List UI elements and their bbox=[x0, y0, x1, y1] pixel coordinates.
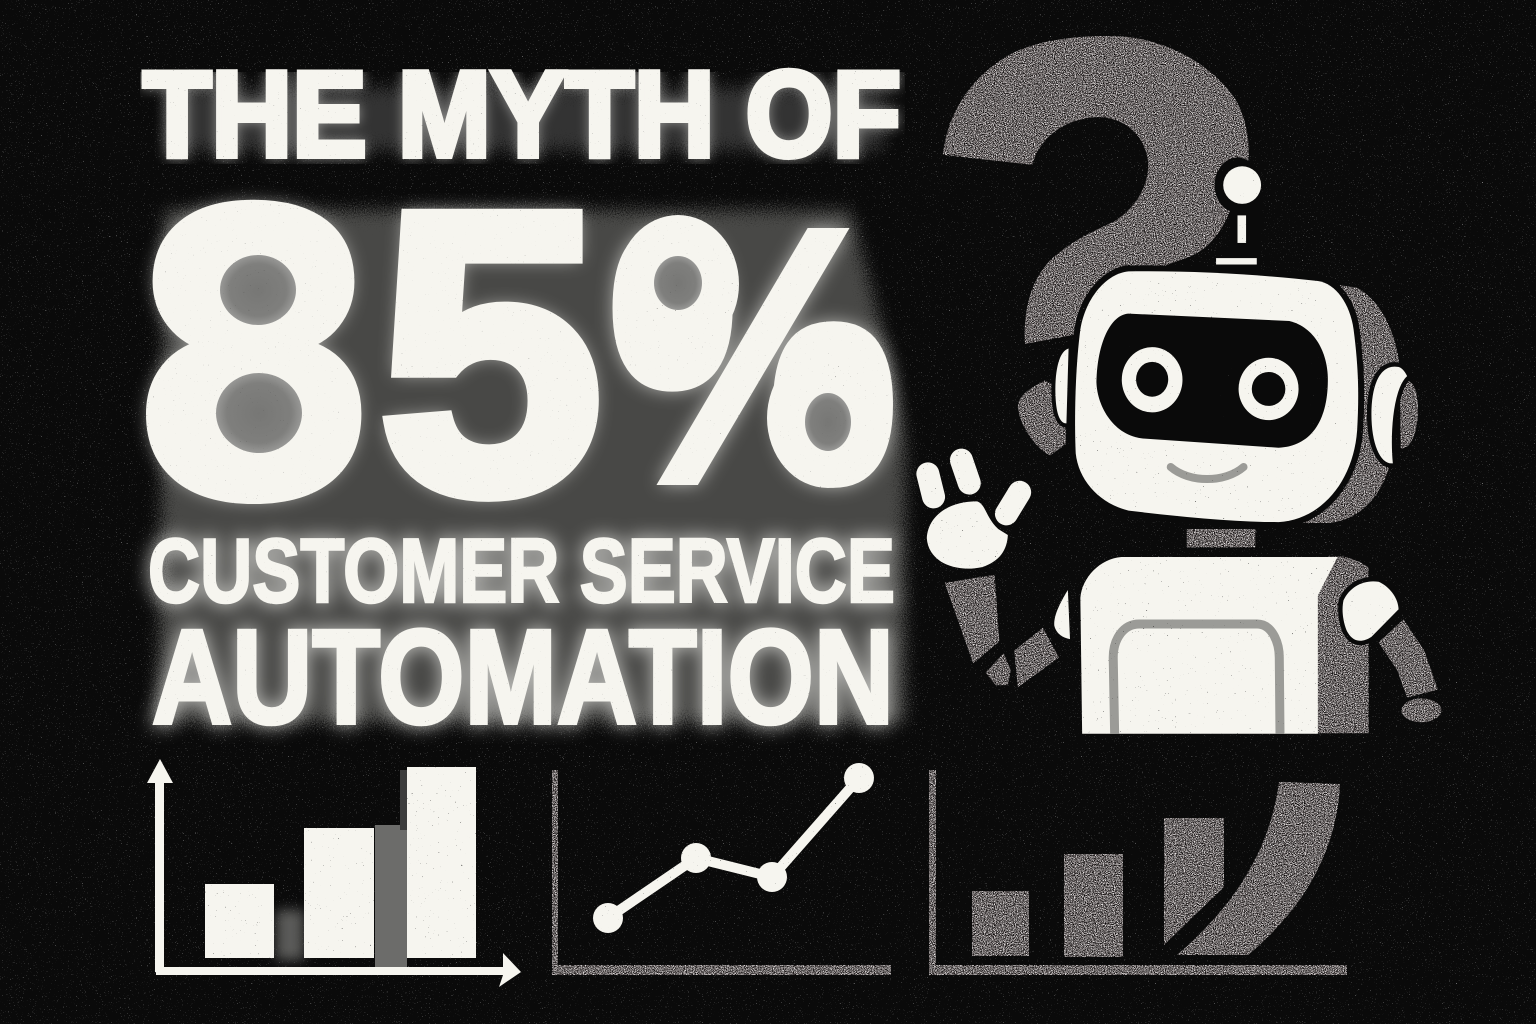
robot grey shadow parts bbox=[945, 283, 1441, 733]
question mark bbox=[943, 36, 1249, 344]
bars bbox=[205, 767, 476, 958]
waving hand bbox=[927, 460, 1020, 569]
chart: line graph bbox=[552, 763, 891, 975]
line chart axes bbox=[552, 770, 891, 975]
title glow bbox=[140, 46, 905, 752]
trend line bbox=[593, 763, 874, 933]
title glow: 8 bbox=[140, 122, 367, 580]
grey bars bbox=[972, 854, 1123, 957]
head bbox=[1075, 271, 1358, 522]
right ear bbox=[1371, 367, 1407, 463]
eyes bbox=[1122, 347, 1299, 420]
cut bar bbox=[1164, 818, 1224, 945]
right hand bbox=[1343, 581, 1399, 641]
left shoulder bbox=[1054, 590, 1070, 639]
visor bbox=[1096, 314, 1328, 448]
title glow: AUTOMATION bbox=[152, 603, 894, 752]
left ear bbox=[1055, 349, 1069, 423]
antenna bbox=[1214, 158, 1261, 270]
big number: 85%: % bbox=[608, 153, 898, 558]
smile bbox=[1171, 467, 1244, 479]
title glow: % bbox=[608, 153, 898, 558]
title text bbox=[140, 46, 901, 752]
chest panel bbox=[1113, 624, 1280, 734]
title glow: 5 bbox=[378, 129, 603, 576]
heading line: Automation: AUTOMATION bbox=[152, 603, 894, 752]
swoosh bbox=[1177, 782, 1340, 955]
title glow: CUSTOMER SERVICE bbox=[148, 521, 895, 622]
robot white parts bbox=[927, 158, 1407, 734]
big number: 85%: 5 bbox=[378, 129, 603, 576]
big number: 85% bbox=[140, 122, 898, 580]
bar shadows bbox=[276, 770, 407, 967]
heading line: Customer Service: CUSTOMER SERVICE bbox=[148, 521, 895, 622]
chart: grey bars with swoosh bbox=[929, 770, 1347, 975]
horizontal axis arrow bbox=[156, 953, 521, 987]
title glow: THE MYTH OF bbox=[143, 46, 901, 182]
big number: 85%: 8 bbox=[140, 122, 367, 580]
heading line: The Myth Of: THE MYTH OF bbox=[143, 46, 901, 182]
chart: bars with arrows bbox=[147, 759, 521, 987]
torso bbox=[1080, 557, 1337, 734]
grey axes bbox=[929, 770, 1347, 975]
robot with question mark bbox=[927, 36, 1441, 734]
vertical axis arrow bbox=[147, 759, 173, 972]
